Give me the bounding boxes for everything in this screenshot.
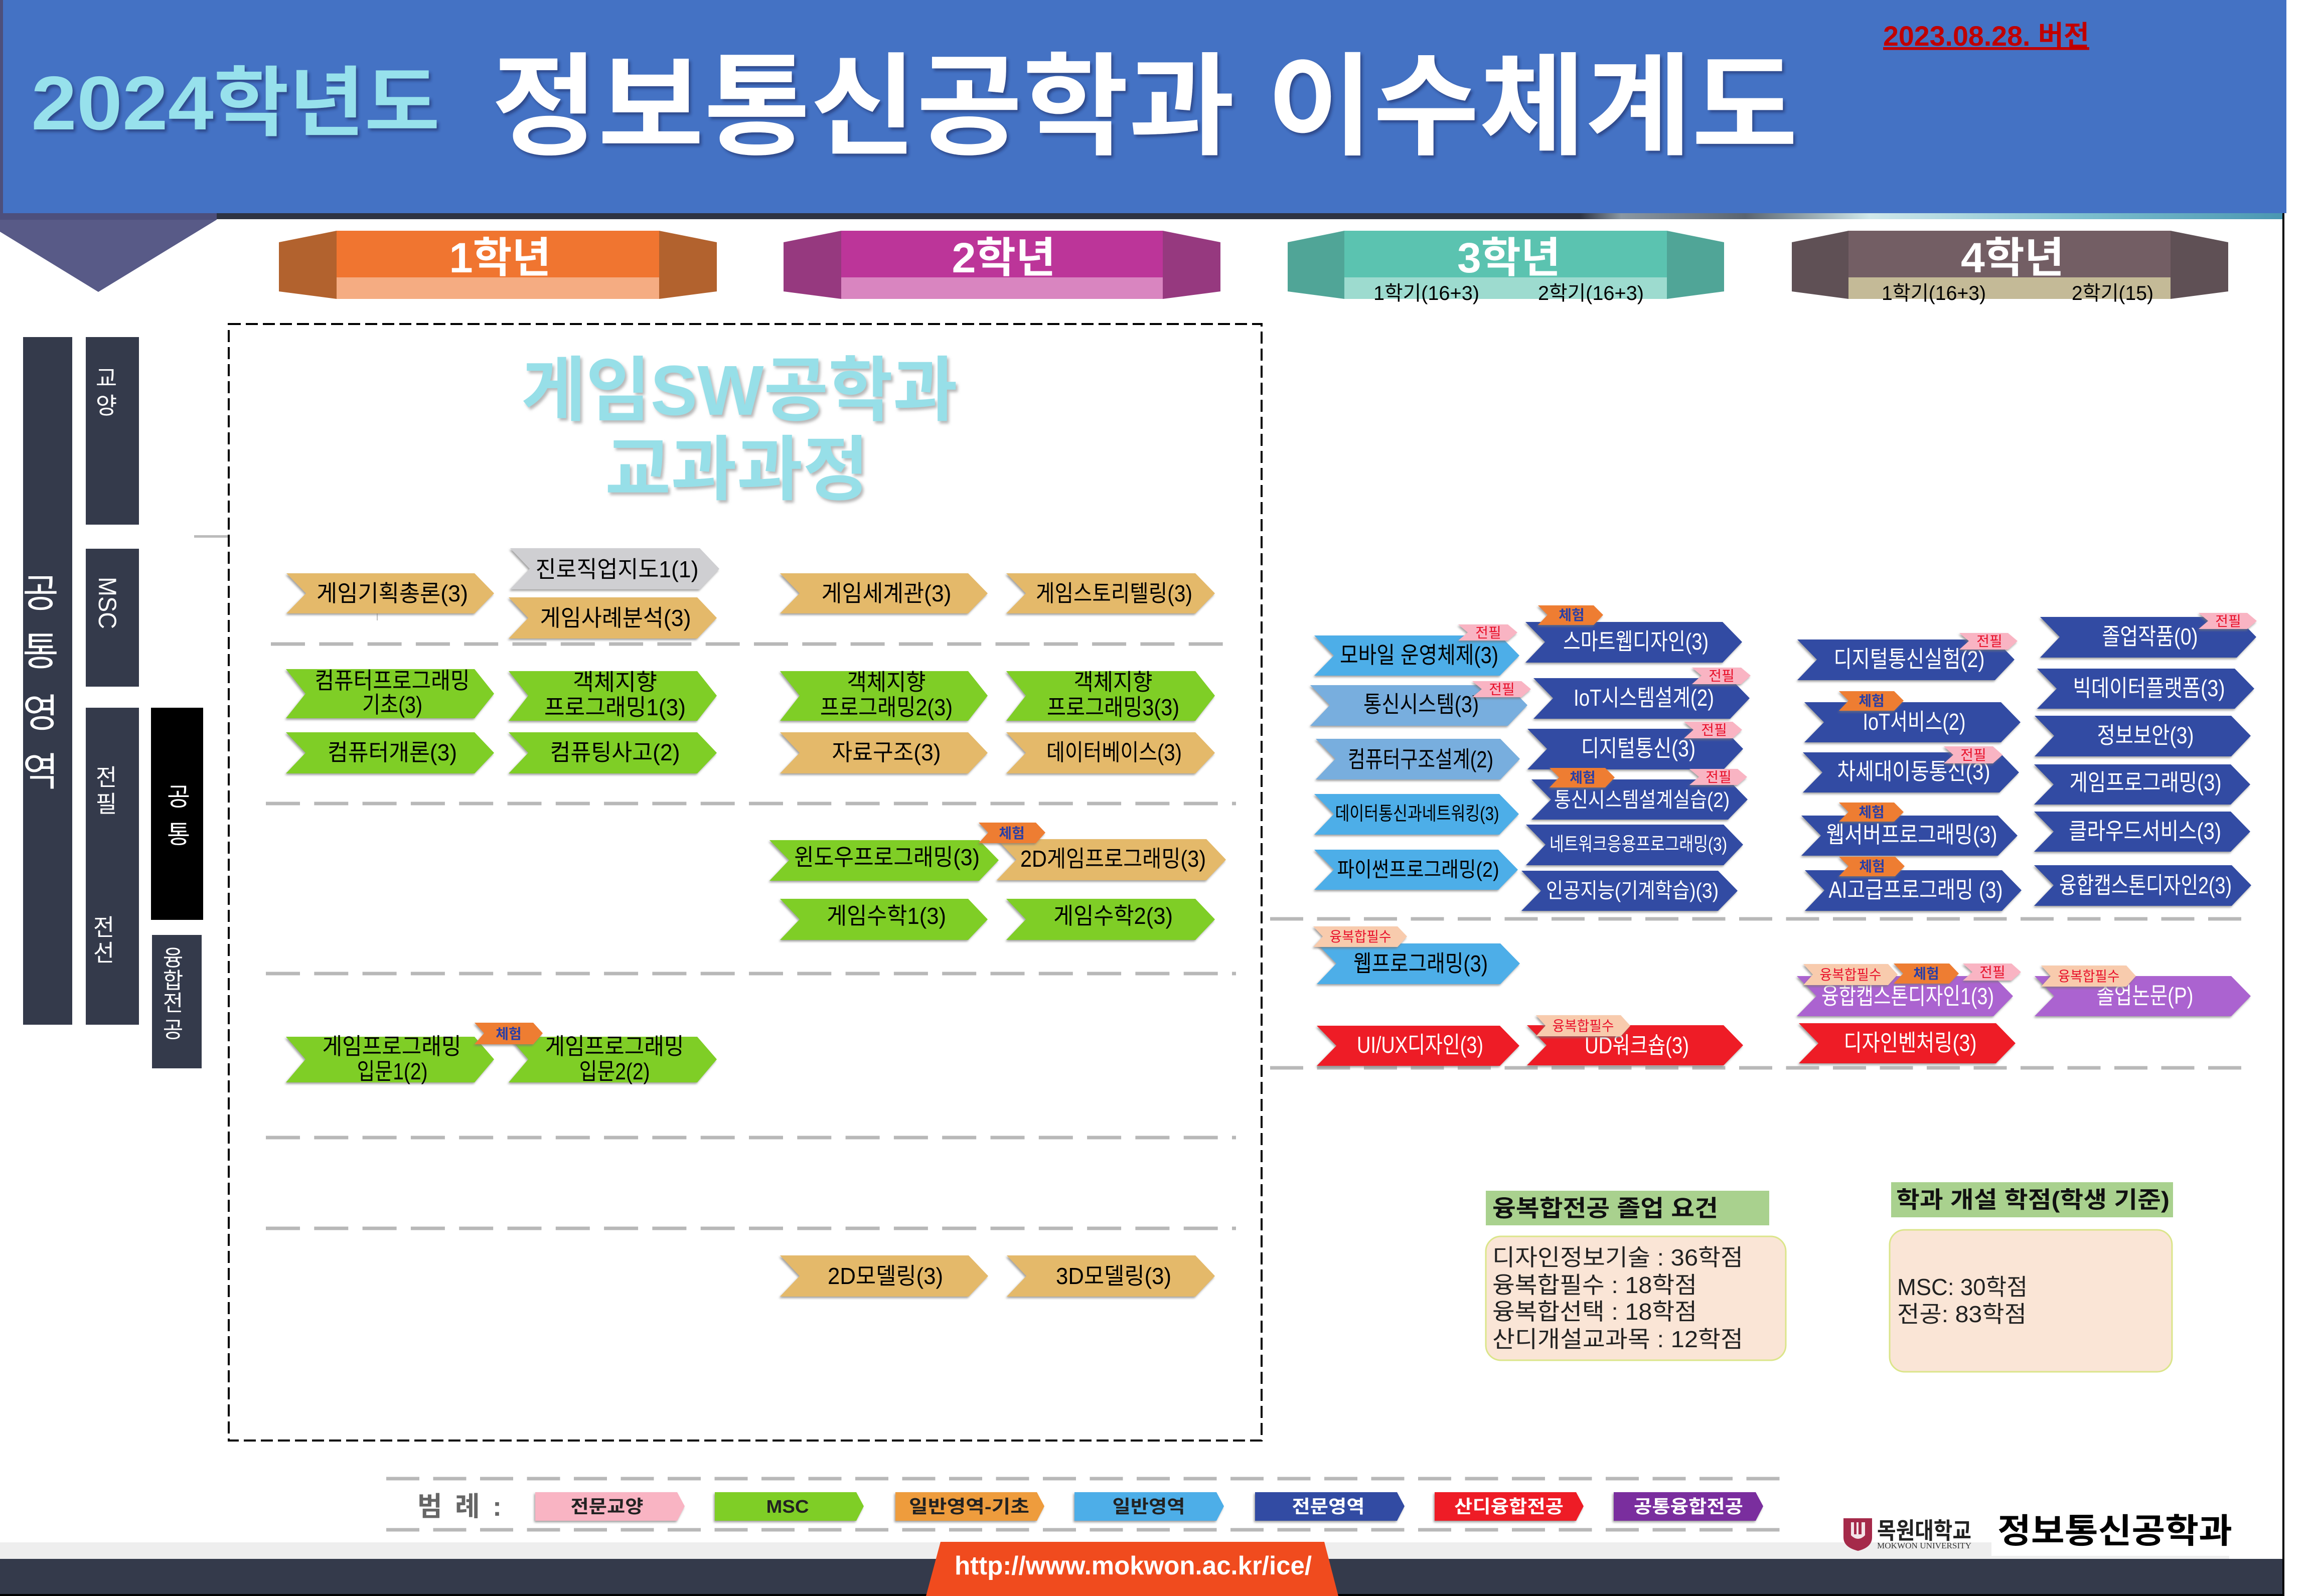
badge: 체험: 체험 (1859, 693, 1885, 709)
panel heading: 게임SW공학과 교과과정: 교과과정 (605, 430, 869, 509)
course: 웹프로그래밍: 웹프로그래밍(3) (1353, 950, 1488, 977)
course: 게임프로그래밍 입문1 (286, 1033, 494, 1084)
course: UI/UX디자인: UI/UX디자인(3) (1357, 1032, 1483, 1058)
badge: 융복합필수 (2041, 966, 2136, 987)
course: 진로직업지도1 (510, 548, 719, 589)
course: 컴퓨터구조설계: 컴퓨터구조설계(2) (1348, 746, 1493, 772)
course: IoT서비스: IoT서비스(2) (1863, 709, 1965, 735)
course: 모바일 운영체제 (1314, 635, 1519, 676)
course: 웹서버프로그래밍 (1801, 816, 2018, 856)
course: 컴퓨터개론 (286, 732, 494, 773)
badge: 체험 (1550, 768, 1615, 787)
badge: 전필: 전필 (1976, 633, 2002, 649)
course: 객체지향 프로그래밍1: 객체지향 (573, 669, 657, 695)
year header: 3학년: 2학기(16+3) (1538, 282, 1644, 304)
badge: 전필: 전필 (1960, 747, 1986, 763)
course: 컴퓨팅사고 (509, 732, 717, 773)
year header: 1학년 (279, 231, 717, 299)
course: 게임기획총론 (286, 573, 494, 613)
info heading (1486, 1191, 1769, 1225)
badge: 체험: 체험 (1859, 859, 1885, 874)
course: 스마트웹디자인: 스마트웹디자인(3) (1563, 628, 1709, 655)
legend item: 일반영역: 일반영역 (1113, 1496, 1185, 1517)
course: 졸업작품: 졸업작품(0) (2102, 623, 2198, 650)
course: 2D모델링 (780, 1255, 988, 1297)
side label: 공통영역: 공 (23, 571, 59, 615)
info: 학과 개설 학점 (1890, 1182, 2173, 1372)
side label: 공통영역: 역 (23, 750, 59, 794)
course: 융합캡스톤디자인1 (1797, 976, 2013, 1016)
badge: 체험 (1839, 803, 1904, 822)
side label: 공통 (151, 708, 203, 920)
course: 게임수학1 (780, 899, 988, 940)
badge: 체험: 체험 (496, 1026, 522, 1042)
course: 모바일 운영체제: 모바일 운영체제(3) (1340, 642, 1498, 668)
course: 객체지향 프로그래밍3 (1006, 669, 1215, 721)
badge: 융복합필수 (1313, 926, 1407, 947)
title: department curriculum: 정보통신공학과 이수체계도 (492, 45, 1798, 170)
side label: 전필 전선: 선 (93, 940, 114, 966)
footer url tab (926, 1542, 1338, 1596)
course: 데이터통신과네트워킹: 데이터통신과네트워킹(3) (1335, 804, 1499, 825)
course: 게임세계관: 게임세계관(3) (822, 580, 951, 606)
course: 컴퓨터프로그래밍 기초: 기초(3) (362, 692, 422, 718)
side label: 융합전공 (152, 935, 202, 1068)
legend item: 산디융합전공: 산디융합전공 (1454, 1496, 1564, 1517)
legend item: 일반영역 (1074, 1492, 1224, 1521)
legend item: 공통융합전공: 공통융합전공 (1634, 1496, 1743, 1517)
course: 통신시스템설계실습: 통신시스템설계실습(2) (1554, 788, 1730, 812)
side label: 공통: 공 (167, 783, 190, 811)
badge: 전필: 전필 (2215, 613, 2241, 629)
side label: 공통영역 (23, 337, 72, 1025)
info body (1890, 1230, 2172, 1372)
course: 3D모델링 (1007, 1255, 1215, 1297)
course: 디지털통신실험 (1797, 640, 2015, 680)
side label: 교양: 교 (96, 365, 117, 391)
top dark band (217, 213, 2282, 219)
course: 객체지향 프로그래밍2 (780, 669, 988, 721)
course: 클라우드서비스: 클라우드서비스(3) (2069, 818, 2221, 844)
course: 웹서버프로그래밍: 웹서버프로그래밍(3) (1826, 822, 1997, 848)
course: 졸업논문 (2035, 976, 2251, 1016)
course: 게임프로그래밍 입문1: 입문1(2) (357, 1058, 427, 1084)
badge: 융복합필수: 융복합필수 (1329, 929, 1392, 944)
course: 객체지향 프로그래밍2: 객체지향 (847, 669, 926, 695)
course: 게임프로그래밍 입문2 (509, 1033, 717, 1084)
title: academic year: 2024학년도 (31, 61, 440, 146)
course: 게임프로그래밍 입문2: 게임프로그래밍 (545, 1033, 684, 1059)
year header: 3학년 (1288, 231, 1724, 304)
side label: 전필 전선 (86, 708, 139, 1025)
course: IoT시스템설계: IoT시스템설계(2) (1574, 685, 1714, 711)
side label: MSC: MSC (93, 577, 121, 629)
badge: 체험: 체험 (1559, 607, 1585, 623)
course: 통신시스템: 통신시스템(3) (1363, 691, 1479, 717)
info body: 전공: 83학점 (1897, 1301, 2027, 1327)
legend item: MSC: MSC (766, 1496, 809, 1517)
badge: 전필 (1959, 633, 2018, 650)
course: 디지털통신실험: 디지털통신실험(2) (1834, 646, 1984, 672)
course: 통신시스템 (1310, 685, 1527, 726)
course: 융합캡스톤디자인1: 융합캡스톤디자인1(3) (1821, 983, 1994, 1009)
course: 자료구조 (780, 732, 988, 773)
badge: 체험 (1538, 605, 1603, 625)
info body: 산디개설교과목 : 12학점 (1492, 1326, 1743, 1352)
footer band (0, 1515, 2284, 1596)
course: 인공지능(기계학습) (1521, 871, 1738, 911)
course: 파이썬프로그래밍: 파이썬프로그래밍(2) (1337, 858, 1499, 881)
badge: 전필: 전필 (1475, 625, 1501, 641)
course: 정보보안: 정보보안(3) (2097, 722, 2194, 748)
course: 파이썬프로그래밍 (1314, 850, 1518, 890)
course: 디자인벤처링: 디자인벤처링(3) (1844, 1030, 1976, 1056)
course: 빅데이터플랫폼 (2037, 669, 2254, 709)
course: 윈도우프로그래밍: 윈도우프로그래밍(3) (794, 844, 980, 870)
side label: 전필 전선: 필 (96, 791, 117, 817)
course: 게임기획총론: 게임기획총론(3) (317, 580, 468, 606)
badge: 융복합필수: 융복합필수 (2058, 969, 2120, 984)
badge: 체험: 체험 (1859, 805, 1885, 820)
badge: 융복합필수 (1803, 964, 1898, 985)
legend item: 전문교양: 전문교양 (571, 1496, 643, 1517)
course: 게임프로그래밍 입문1: 게임프로그래밍 (322, 1033, 461, 1059)
course: 객체지향 프로그래밍1: 프로그래밍1(3) (544, 694, 686, 720)
course: UD워크숍 (1527, 1025, 1743, 1065)
year header: 1학년: 1학년 (449, 234, 551, 281)
badge: 전필: 전필 (1709, 668, 1735, 684)
side label: 공통영역: 통 (23, 629, 59, 674)
header banner (0, 0, 2286, 213)
info heading (1891, 1182, 2173, 1217)
course: 게임사례분석: 게임사례분석(3) (540, 605, 691, 631)
logo: Mokwon University (1843, 1518, 1971, 1551)
side label: MSC (86, 549, 139, 687)
info: 융복합전공 졸업 요건 (1486, 1191, 1786, 1360)
legend (417, 1492, 1763, 1522)
panel heading: 게임SW공학과 교과과정: 게임SW공학과 (521, 351, 958, 430)
badge: 체험 (1894, 964, 1959, 984)
course: 인공지능(기계학습): 인공지능(기계학습)(3) (1546, 879, 1719, 902)
course: 게임프로그래밍: 게임프로그래밍(3) (2070, 769, 2221, 795)
side label: 공통영역: 영 (23, 691, 59, 735)
legend item: 산디융합전공 (1435, 1492, 1584, 1521)
year header: 4학년 (1792, 231, 2228, 304)
legend item: MSC (715, 1492, 864, 1521)
badge: 체험 (979, 823, 1045, 843)
course: 데이터베이스: 데이터베이스(3) (1046, 739, 1182, 765)
right page border (2282, 213, 2284, 1596)
side label: 전필 전선: 전 (96, 764, 117, 790)
side label: 융합전공: 전 (163, 991, 183, 1016)
header corner triangle (0, 213, 217, 292)
course: 클라우드서비스 (2034, 812, 2250, 852)
side label: 전필 전선: 전 (93, 914, 114, 940)
version note: 2023.08.28. 버전 (1883, 20, 2089, 52)
side label: 공통: 통 (167, 821, 190, 849)
legend item: 일반영역-기초: 일반영역-기초 (909, 1496, 1029, 1517)
legend item: 전문교양 (535, 1492, 685, 1521)
dashed panel: 게임SW공학과 (229, 324, 1262, 1441)
course: AI고급프로그래밍: AI고급프로그래밍 (3) (1829, 877, 2002, 903)
info body: 융복합선택 : 18학점 (1492, 1299, 1697, 1325)
badge: 융복합필수: 융복합필수 (1552, 1018, 1614, 1034)
course: UD워크숍: UD워크숍(3) (1585, 1032, 1689, 1058)
year header: 2학년 (784, 231, 1220, 299)
course: 2D모델링: 2D모델링(3) (828, 1263, 943, 1289)
info heading: 학과 개설 학점(학생 기준) (1896, 1187, 2170, 1213)
course: 빅데이터플랫폼: 빅데이터플랫폼(3) (2073, 675, 2225, 701)
course: 컴퓨터개론: 컴퓨터개론(3) (328, 739, 457, 765)
course: 2D게임프로그래밍 (997, 839, 1226, 880)
course: 디자인벤처링 (1799, 1023, 2016, 1063)
course: 게임스토리텔링 (1006, 573, 1215, 613)
course: 객체지향 프로그래밍3: 프로그래밍3(3) (1047, 694, 1179, 720)
badge: 융복합필수: 융복합필수 (1820, 967, 1881, 983)
year header: 3학년: 1학기(16+3) (1373, 282, 1479, 304)
legend item: 전문영역 (1255, 1492, 1405, 1521)
legend item: 일반영역-기초 (895, 1492, 1044, 1521)
badge: 전필: 전필 (1706, 769, 1732, 785)
badge: 전필 (1692, 668, 1751, 684)
course: 웹프로그래밍 (1317, 943, 1520, 984)
course: 융합캡스톤디자인2: 융합캡스톤디자인2(3) (2059, 872, 2232, 898)
badge: 체험 (1839, 857, 1905, 876)
badge: 전필: 전필 (1489, 682, 1515, 697)
course: 게임프로그래밍 (2034, 764, 2250, 805)
badge: 체험: 체험 (999, 826, 1025, 841)
side label: 융합전공: 공 (163, 1018, 183, 1042)
course: 게임수학1: 게임수학1(3) (827, 903, 946, 929)
course: 네트워크응용프로그래밍 (1526, 825, 1743, 865)
badge: 융복합필수 (1536, 1015, 1630, 1036)
year header: 4학년: 1학기(16+3) (1882, 282, 1986, 304)
info heading: 융복합전공 졸업 요건 (1492, 1195, 1718, 1221)
course: 통신시스템설계실습 (1531, 779, 1748, 820)
course: 컴퓨터구조설계 (1316, 739, 1520, 779)
course: IoT서비스 (1804, 702, 2021, 742)
course: 컴퓨터프로그래밍 기초: 컴퓨터프로그래밍 (315, 668, 470, 694)
course: 정보보안 (2035, 716, 2251, 756)
year header: 3학년: 3학년 (1457, 234, 1561, 281)
legend title: 범 례 : (417, 1492, 502, 1522)
info body: 디자인정보기술 : 36학점 (1492, 1244, 1743, 1270)
side label: 융합전공: 합 (163, 969, 183, 993)
course: 게임수학2 (1006, 899, 1215, 940)
course: 디지털통신 (1527, 729, 1743, 769)
legend item: 공통융합전공 (1614, 1492, 1763, 1521)
course: 게임세계관 (780, 573, 988, 613)
panel heading: 게임SW공학과 교과과정 (521, 351, 958, 509)
badge: 전필: 전필 (1979, 965, 2005, 980)
course: 차세대이동통신 (1803, 752, 2019, 792)
course: 차세대이동통신: 차세대이동통신(3) (1837, 758, 1990, 784)
courses: 3rd-4th year (1310, 605, 2257, 1066)
side label: 교양: 양 (96, 393, 117, 419)
badge: 전필 (1944, 746, 2002, 763)
badge: 전필 (1963, 964, 2021, 981)
courses: 1st-2nd year (286, 548, 1226, 1297)
logo: Mokwon University: MOKWON UNIVERSITY (1877, 1541, 1971, 1550)
course: 2D게임프로그래밍: 2D게임프로그래밍(3) (1020, 846, 1206, 872)
info body: MSC: 30학점 (1897, 1274, 2028, 1300)
course: 데이터통신과네트워킹 (1314, 794, 1519, 835)
badge: 체험: 체험 (1570, 770, 1596, 785)
badge: 전필 (1472, 681, 1531, 697)
course: 게임프로그래밍 입문2: 입문2(2) (579, 1058, 650, 1084)
course: 졸업작품 (2040, 617, 2256, 658)
course: 컴퓨터프로그래밍 기초 (286, 668, 494, 718)
course: 컴퓨팅사고: 컴퓨팅사고(2) (550, 739, 680, 765)
course: 게임수학2: 게임수학2(3) (1053, 903, 1173, 929)
course: 융합캡스톤디자인2 (2034, 865, 2251, 906)
course: 객체지향 프로그래밍3: 객체지향 (1073, 669, 1153, 695)
course: 졸업논문: 졸업논문(P) (2097, 983, 2193, 1009)
course: IoT시스템설계 (1533, 678, 1750, 719)
course: UI/UX디자인 (1317, 1026, 1519, 1066)
side label: 융합전공: 융 (163, 946, 183, 971)
course: 네트워크응용프로그래밍: 네트워크응용프로그래밍(3) (1550, 834, 1727, 855)
badge: 전필 (1689, 769, 1747, 785)
course: 3D모델링: 3D모델링(3) (1056, 1263, 1171, 1289)
info body: 융복합필수 : 18학점 (1492, 1272, 1697, 1298)
badge: 체험 (1839, 691, 1904, 711)
badge: 체험 (475, 1023, 543, 1044)
course: 자료구조: 자료구조(3) (832, 739, 941, 765)
badge: 전필: 전필 (1701, 722, 1727, 738)
footer url tab: http://www.mokwon.ac.kr/ice/ (955, 1551, 1312, 1580)
course: 디지털통신: 디지털통신(3) (1581, 735, 1695, 761)
badge: 전필 (2199, 613, 2257, 629)
course: AI고급프로그래밍 (1805, 870, 2022, 911)
course: 윈도우프로그래밍 (769, 840, 999, 881)
badge: 체험: 체험 (1913, 966, 1939, 982)
badge: 전필 (1458, 624, 1517, 641)
course: 객체지향 프로그래밍2: 프로그래밍2(3) (820, 694, 953, 720)
course: 객체지향 프로그래밍1 (509, 669, 717, 721)
course: 진로직업지도1: 진로직업지도1(1) (536, 556, 698, 582)
info body (1486, 1236, 1786, 1360)
footer department name: 정보통신공학과 (1997, 1512, 2232, 1550)
badge: 전필 (1684, 722, 1742, 738)
side label: 교양 (86, 337, 139, 525)
course: 게임스토리텔링: 게임스토리텔링(3) (1036, 580, 1192, 606)
course: 데이터베이스 (1006, 732, 1215, 773)
course: 스마트웹디자인 (1525, 622, 1742, 663)
course: 게임사례분석 (509, 597, 717, 639)
logo: Mokwon University: 목원대학교 (1877, 1518, 1971, 1544)
year header: 4학년: 2학기(15) (2072, 282, 2153, 304)
year header: 4학년: 4학년 (1961, 234, 2064, 281)
legend item: 전문영역: 전문영역 (1292, 1496, 1364, 1517)
year header: 2학년: 2학년 (952, 234, 1055, 281)
